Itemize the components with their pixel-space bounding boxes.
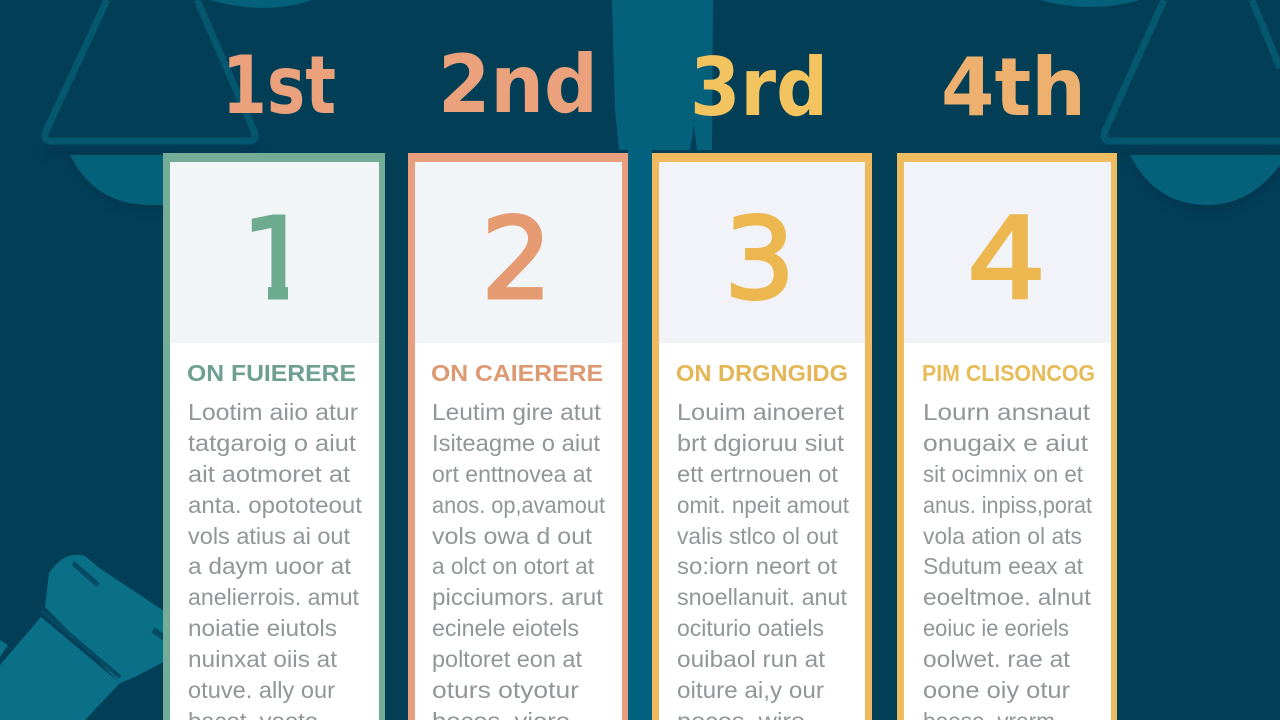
card 1 body text: Lootim aiio atur — [188, 399, 358, 425]
card 4 body text: Sdutum eeax at — [923, 553, 1084, 579]
heading: 4th: 4th — [941, 41, 1086, 134]
card 1 body text: tatgaroig o aiut — [188, 430, 357, 456]
number 4: 4 — [967, 195, 1046, 325]
card 2 title: ON CAIERERE — [431, 360, 603, 386]
card 3 body text: ociturio oatiels — [677, 615, 824, 641]
panel: card 3 — [652, 153, 872, 720]
card 1 body text — [188, 399, 363, 720]
heading: 2nd: 2nd — [438, 38, 598, 131]
card 3 body text: so:iorn neort ot — [677, 553, 838, 579]
card 4 body text: sit ocimnix on et — [923, 461, 1084, 487]
card 2 body text: poltoret eon at — [432, 646, 583, 672]
card 4 body text: anus. inpiss,porat — [923, 492, 1093, 518]
card 3 body text: valis stlco ol out — [677, 523, 839, 549]
card 3 body text: brt dgioruu siut — [677, 430, 845, 456]
heading: 1st: 1st — [222, 39, 336, 132]
central scale pillar — [612, 0, 713, 150]
card 2 body text: ort enttnovea at — [432, 461, 593, 487]
card 2 body text: ecinele eiotels — [432, 615, 579, 641]
card 1 body text: a daym uoor at — [188, 553, 352, 579]
card 3 title: ON DRGNGIDG — [676, 360, 848, 386]
card 2 body text: picciumors. arut — [432, 584, 604, 610]
card 1 body text: nuinxat oiis at — [188, 646, 338, 672]
panel: card 1 — [163, 153, 385, 720]
card 4 body text — [923, 399, 1093, 720]
card 3 body text: ouibaol run at — [677, 646, 826, 672]
card 2 body text: vols owa d out — [432, 523, 593, 549]
card 3 body text — [677, 399, 850, 720]
heading: 3rd: 3rd — [690, 41, 828, 134]
card 4 body text: eoiuc ie eoriels — [923, 615, 1069, 641]
number 1: 1 — [241, 195, 312, 325]
card 1 body text: vols atius ai out — [188, 523, 351, 549]
card 1 body text: anelierrois. amut — [188, 584, 360, 610]
number 3: 3 — [724, 195, 795, 325]
card 4 body text: vola ation ol ats — [923, 523, 1082, 549]
card 3 body text: snoellanuit. anut — [677, 584, 848, 610]
card 3 body text: Louim ainoeret — [677, 399, 845, 425]
card 2 body text: Leutim gire atut — [432, 399, 602, 425]
icon: gavel — [0, 555, 167, 720]
card 3 body text: oiture ai,y our — [677, 677, 824, 703]
card 3 body text: ett ertrnouen ot — [677, 461, 839, 487]
icon: right scale pan — [1040, 0, 1280, 210]
panel: card 4 — [897, 153, 1117, 720]
card 2 body text: Isiteagme o aiut — [432, 430, 601, 456]
card 4 body text: oone oiy otur — [923, 677, 1070, 703]
icon: left scale pan — [45, 0, 312, 208]
card 1 title: ON FUIERERE — [187, 360, 356, 386]
card 1 body text: noiatie eiutols — [188, 615, 337, 641]
card 4 body text: onugaix e aiut — [923, 430, 1089, 456]
card 2 body text: a olct on otort at — [432, 553, 595, 579]
card 4 title: PIM CLISONCOG — [922, 360, 1095, 386]
card 4 body text: eoeltmoe. alnut — [923, 584, 1092, 610]
card 1 body text: anta. opototeout — [188, 492, 363, 518]
card 1 body text: otuve. ally our — [188, 677, 335, 703]
card 2 body text: anos. op,avamout — [432, 492, 606, 518]
card 4 body text: Lourn ansnaut — [923, 399, 1091, 425]
card 2 body text: oturs otyotur — [432, 677, 579, 703]
card 4 body text: oolwet. rae at — [923, 646, 1071, 672]
panel: card 2 — [408, 153, 628, 720]
number 2: 2 — [481, 195, 552, 325]
card 1 body text: ait aotmoret at — [188, 461, 351, 487]
card 2 body text — [432, 399, 606, 720]
card 3 body text: omit. npeit amout — [677, 492, 850, 518]
